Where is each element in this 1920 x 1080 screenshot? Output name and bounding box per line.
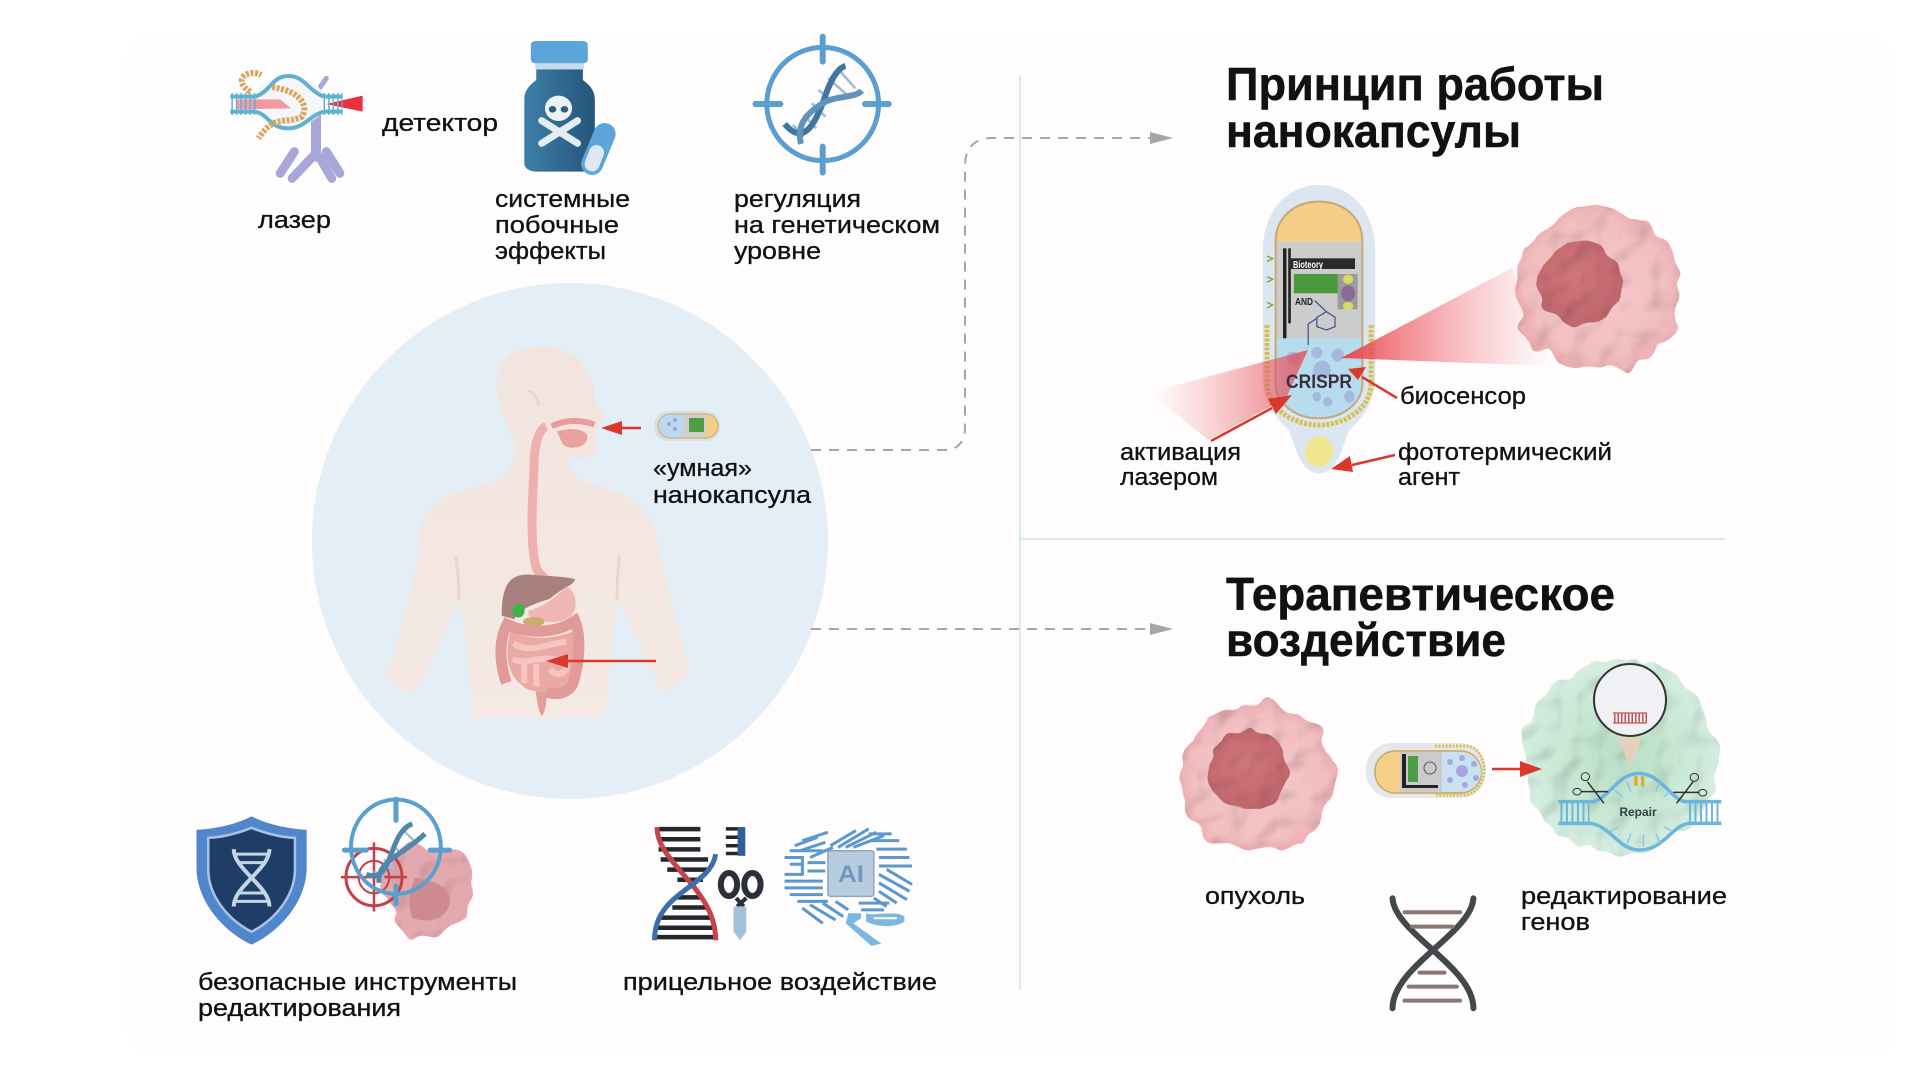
label: targeted action: прицельное воздействие [623,969,937,996]
icon: tumor cell in crosshairs [341,799,474,936]
circle panel: human body background [312,283,828,799]
capsule text labels: Bioteory [1293,260,1323,271]
dividers [1020,76,1725,990]
icon: DNA in target [755,37,889,173]
capsule text labels: AND [1295,297,1313,308]
arrow: intestine target [546,654,656,668]
label: smart nanocapsule: нанокапсула [653,482,812,509]
AI chip label: AI [838,861,864,888]
heading: working principle [1226,58,1604,157]
heading: therapeutic effect: воздействие [1226,614,1506,666]
magnifier circle with DNA [1594,664,1666,736]
label: systemic side effects: эффекты [495,238,606,265]
label: gene-level regulation [734,186,940,265]
horizontal capsule [1366,743,1486,798]
label: laser activation: лазером [1120,464,1218,491]
label: laser activation [1120,439,1241,491]
icon: small capsule [654,411,720,441]
heading: working principle: Принцип работы [1226,58,1604,110]
heading: therapeutic effect [1226,568,1615,666]
label: systemic side effects: побочные [495,212,619,239]
label: photothermal agent: агент [1398,464,1460,491]
heading: therapeutic effect: Терапевтическое [1226,568,1615,620]
dashed arrow: capsule to working principle [811,132,1173,450]
label: tumor: опухоль [1205,883,1305,910]
edited green cell with repair [1522,659,1721,855]
label: gene editing: редактирование [1521,883,1727,910]
label: systemic side effects: системные [495,186,630,213]
laser beam to tumor cell [1341,268,1551,366]
label: systemic side effects [495,186,630,265]
label: safe editing tools [198,969,517,1022]
label: gene-level regulation: уровне [734,238,821,265]
label: gene editing [1521,883,1727,936]
icon: poison bottle and pill [524,41,605,172]
label: photothermal agent: фототермический [1398,439,1612,466]
icon: shield with DNA [197,816,307,945]
label: safe editing tools: редактирования [198,995,401,1022]
label: laser activation: активация [1120,439,1241,466]
icon: AI brain chip [785,829,912,946]
arrow: laser activation [1211,395,1292,441]
capsule text labels: CRISPR [1286,372,1352,393]
arrow: capsule to mouth [601,421,641,435]
label: smart nanocapsule: «умная» [653,455,752,482]
arrow: biosensor [1348,367,1397,398]
label: smart nanocapsule [653,455,812,509]
label: laser: лазер [258,207,331,234]
label: detector: детектор [382,110,498,137]
capsule text labels [1286,260,1352,393]
tumor cell with nucleus [1515,208,1679,372]
label: safe editing tools: безопасные инструменты [198,969,517,996]
label: photothermal agent [1398,439,1612,491]
human body with digestive tract [384,346,690,718]
label: gene editing: генов [1521,909,1590,936]
icon: dark DNA helix [1393,898,1473,1008]
label: gene-level regulation: регуляция [734,186,861,213]
dashed arrow: body to therapeutic effect [811,623,1173,635]
label: gene-level regulation: на генетическом [734,212,940,239]
tumor cell [1180,701,1334,855]
DNA repair strands [1558,773,1721,850]
arrow: photothermal agent [1331,455,1395,472]
icon: detector and laser [230,73,363,178]
heading: working principle: нанокапсулы [1226,105,1521,157]
repair label: Repair [1619,805,1657,819]
icon: DNA ladder and scissors [654,827,761,940]
activation laser beam [1150,350,1308,440]
label: biosensor: биосенсор [1400,383,1526,410]
arrow: capsule to edited cell [1492,761,1542,777]
large capsule [1263,185,1375,473]
magnifier cone [1618,738,1642,767]
